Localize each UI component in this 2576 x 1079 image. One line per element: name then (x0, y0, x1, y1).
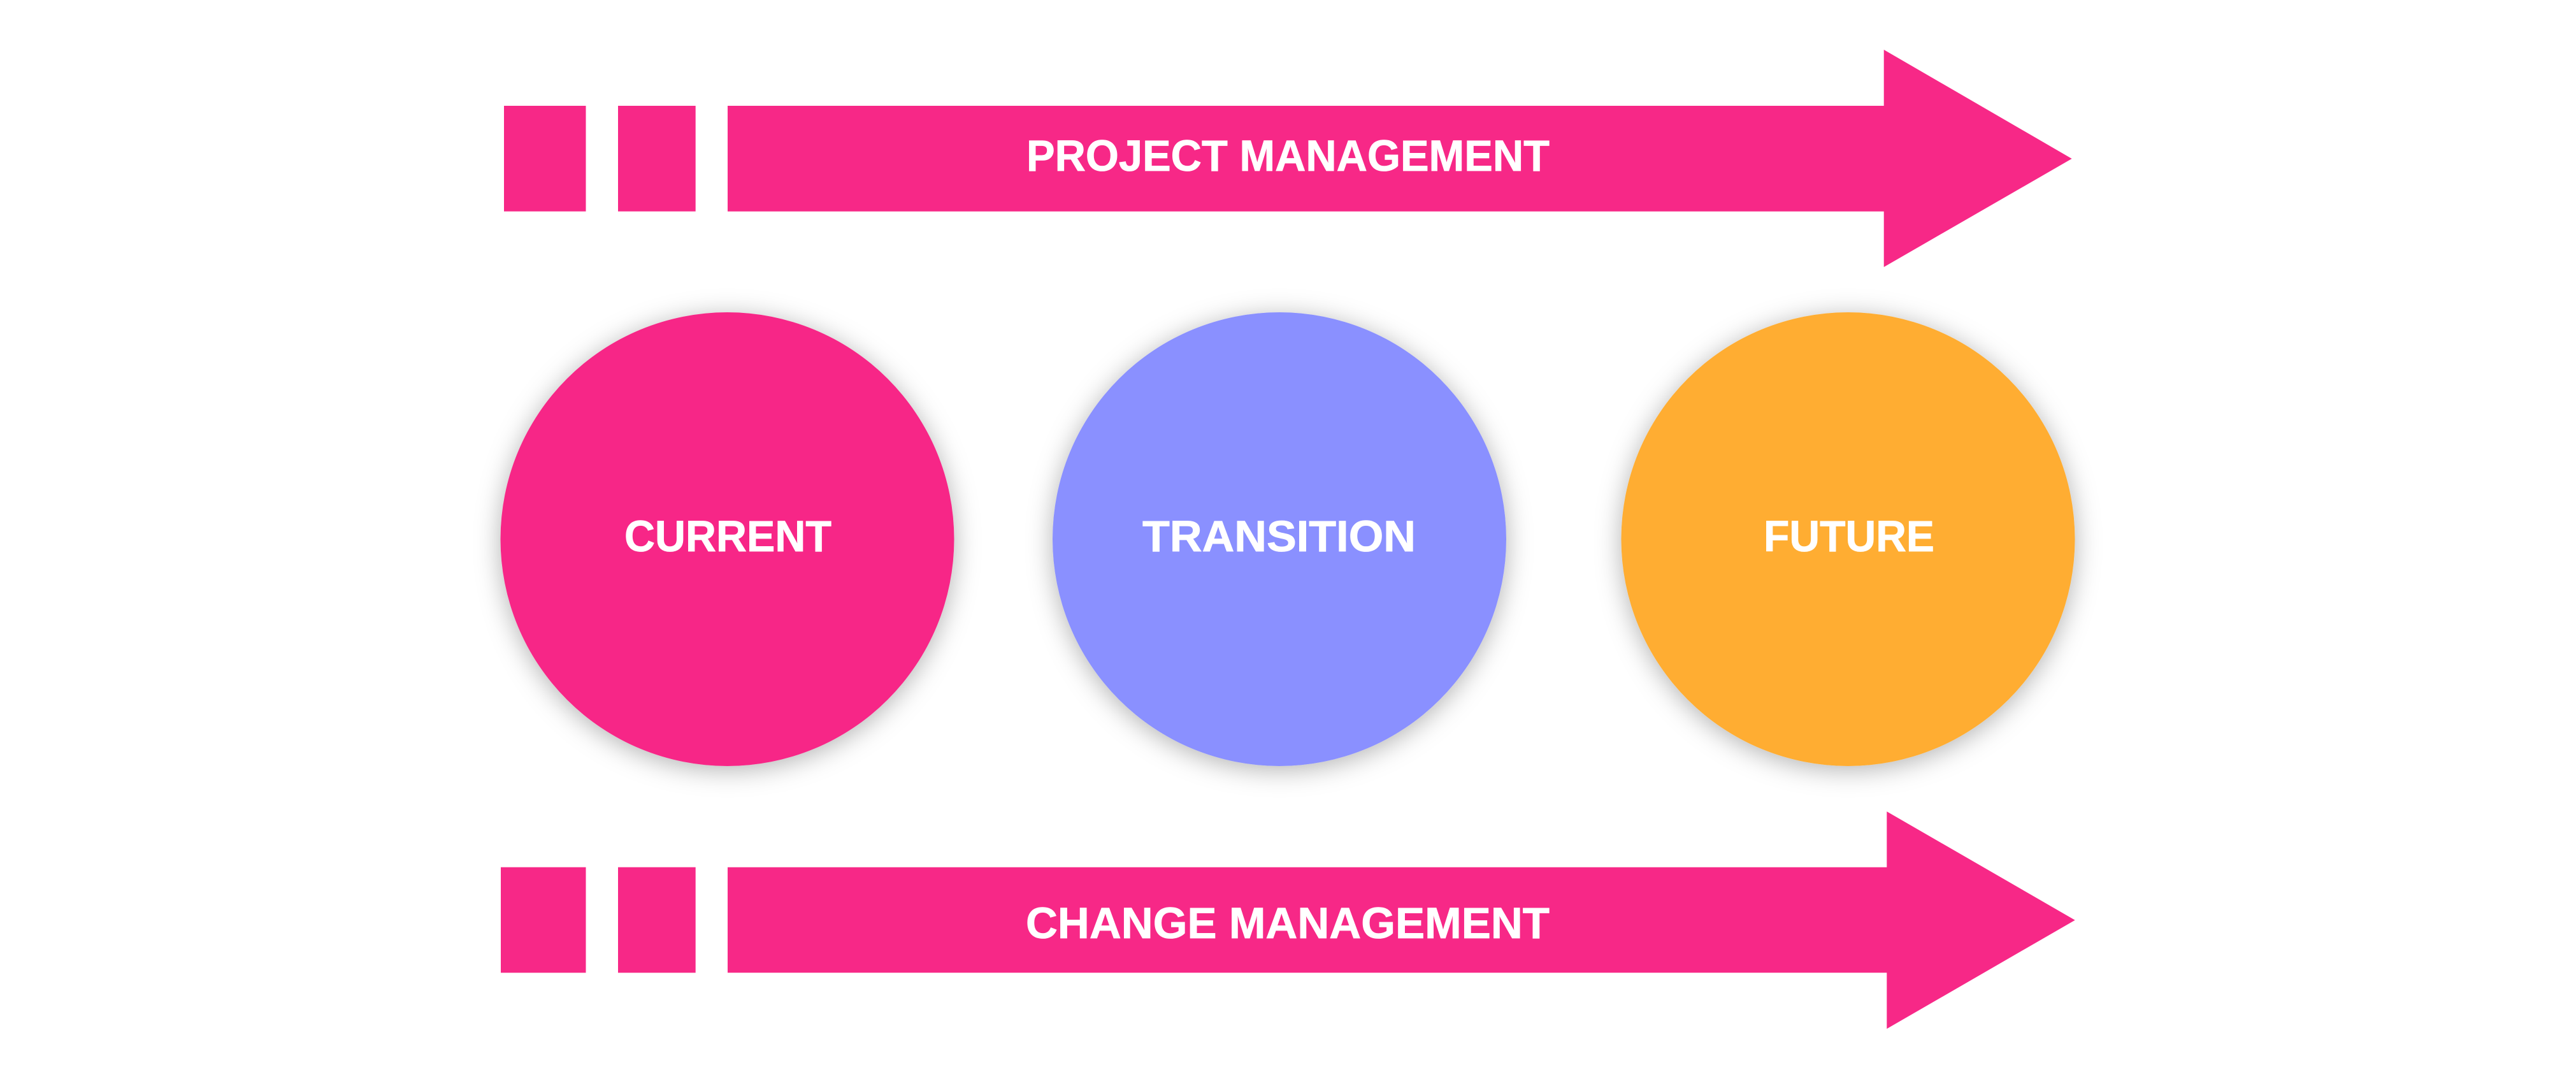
label: project management: PROJECT MANAGEMENT (1026, 131, 1550, 180)
label: change management: CHANGE MANAGEMENT (1026, 899, 1550, 948)
arrow shape (728, 811, 2075, 1029)
circle: current (501, 312, 954, 766)
block: second dash (618, 106, 696, 212)
label: transition: TRANSITION (1142, 512, 1416, 561)
circle: future (1621, 312, 2075, 766)
label: future: FUTURE (1764, 512, 1934, 561)
arrow shape (728, 50, 2072, 267)
circle: transition (1053, 312, 1506, 766)
block: second dash (618, 867, 696, 973)
block: first dash (504, 106, 586, 212)
block: first dash (501, 867, 586, 973)
arrow: project management (504, 50, 2072, 267)
label: current: CURRENT (624, 512, 831, 561)
arrow: change management (501, 811, 2075, 1029)
